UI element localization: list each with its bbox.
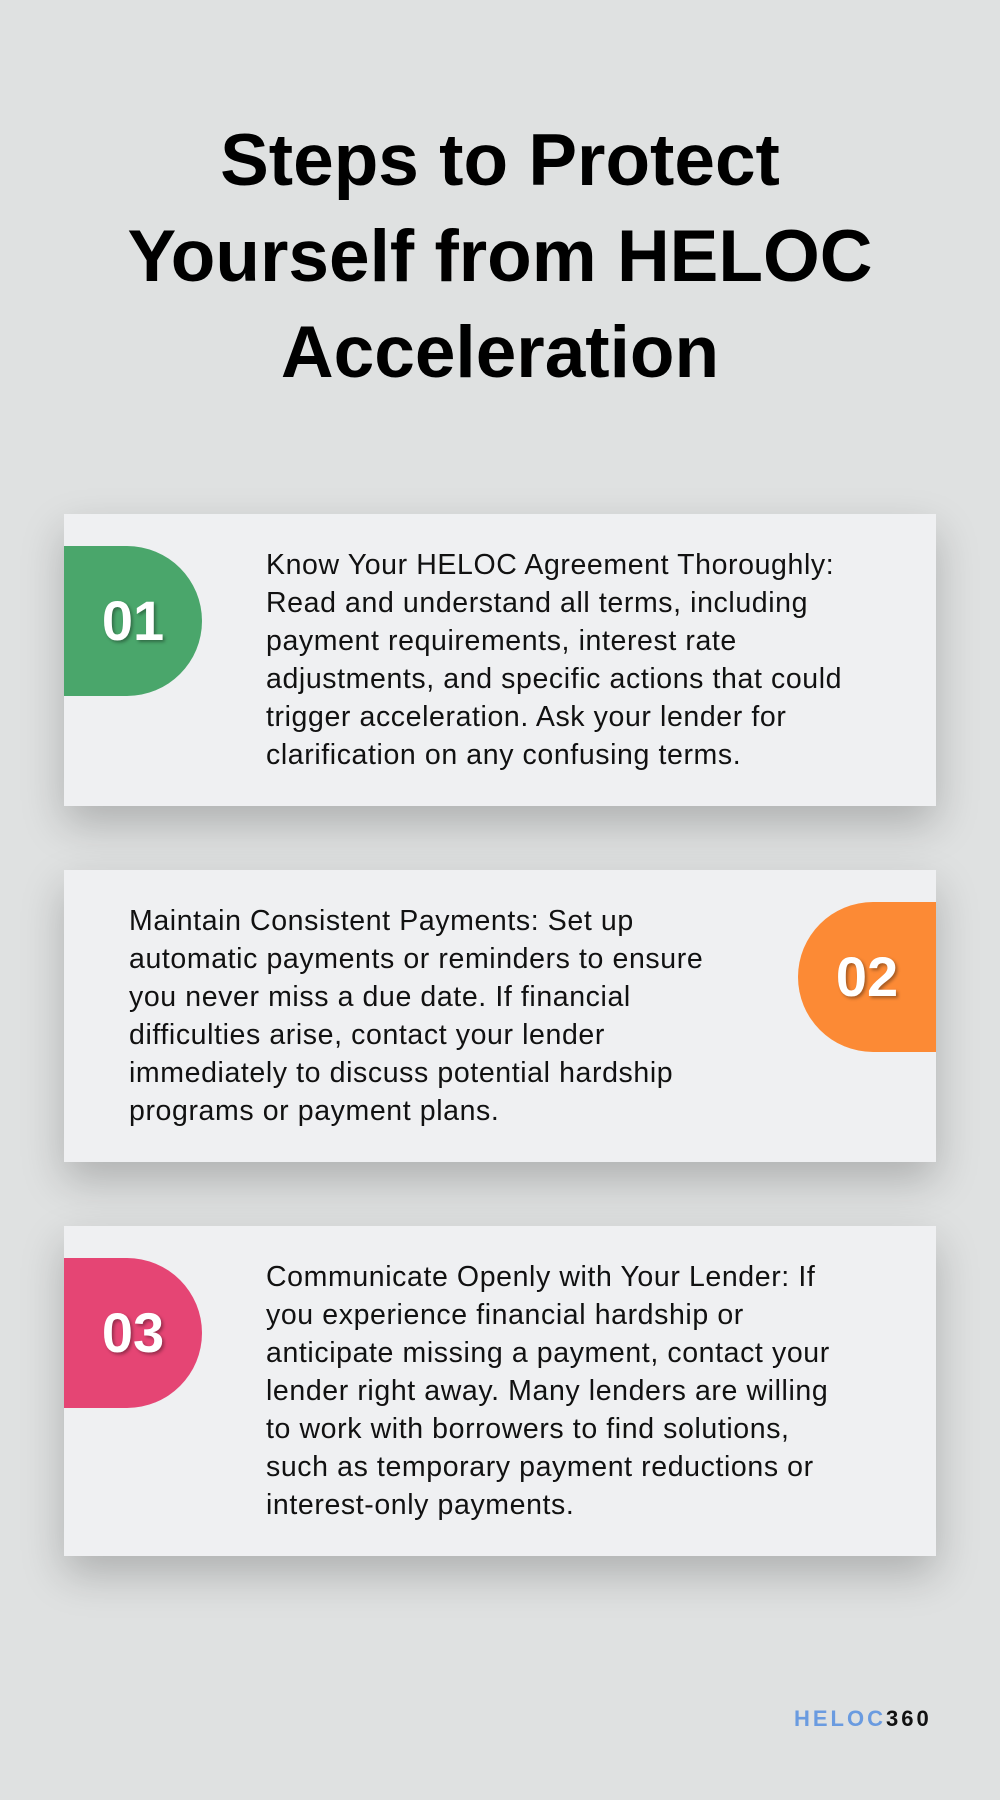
panel: step 3	[64, 1226, 936, 1556]
text step 3: to work with borrowers to find solutions,	[266, 1413, 790, 1445]
badge 01	[64, 546, 202, 696]
text step 3: Communicate Openly with Your Lender: If	[266, 1261, 815, 1293]
title: Steps to Protect	[220, 120, 780, 201]
text step 3	[266, 1261, 830, 1521]
title: Yourself from HELOC	[128, 216, 872, 297]
text step 1	[266, 549, 842, 771]
logo: HELOC360	[794, 1706, 932, 1731]
panel: step 2	[64, 870, 936, 1162]
title: Acceleration	[281, 312, 719, 393]
badge 03: 03	[102, 1301, 164, 1364]
text step 1: Know Your HELOC Agreement Thoroughly:	[266, 549, 834, 581]
text step 3: interest-only payments.	[266, 1489, 574, 1521]
text step 3: such as temporary payment reductions or	[266, 1451, 814, 1483]
text step 1: trigger acceleration. Ask your lender for	[266, 701, 786, 733]
text step 2: difficulties arise, contact your lender	[129, 1019, 605, 1051]
text step 2: you never miss a due date. If financial	[129, 981, 631, 1013]
text step 1: Read and understand all terms, including	[266, 587, 808, 619]
text step 2: Maintain Consistent Payments: Set up	[129, 905, 634, 937]
badge 03	[64, 1258, 202, 1408]
title	[128, 120, 872, 393]
badge 01: 01	[102, 589, 164, 652]
panel: step 1	[64, 514, 936, 806]
text step 2	[129, 905, 703, 1127]
text step 3: lender right away. Many lenders are willing	[266, 1375, 828, 1407]
text step 2: automatic payments or reminders to ensure	[129, 943, 703, 975]
text step 2: immediately to discuss potential hardship	[129, 1057, 673, 1089]
text step 1: clarification on any confusing terms.	[266, 739, 741, 771]
text step 1: payment requirements, interest rate	[266, 625, 737, 657]
text step 1: adjustments, and specific actions that could	[266, 663, 842, 695]
badge 02	[798, 902, 936, 1052]
text step 3: you experience financial hardship or	[266, 1299, 744, 1331]
text step 2: programs or payment plans.	[129, 1095, 499, 1127]
text step 3: anticipate missing a payment, contact your	[266, 1337, 830, 1369]
badge 02: 02	[836, 945, 898, 1008]
